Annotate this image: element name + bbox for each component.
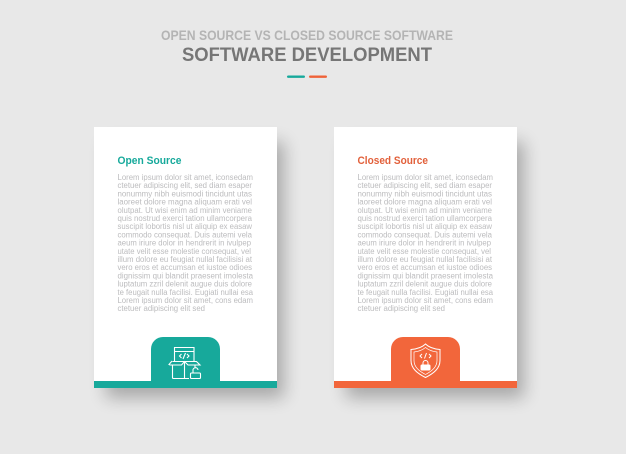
body text: commodo consequat. Duis autemi vela: [118, 230, 253, 239]
body text: ctetuer adipiscing elit sed: [118, 304, 205, 313]
heading: Open Source: [118, 155, 182, 167]
body text: illum dolore eu feugiat nullal facilisisi at: [358, 255, 493, 264]
body text: olutpat. Ut wisi enim ad minim veniame: [118, 206, 253, 215]
body text: aeum iriure dolor in hendrerit in ivulpep: [118, 239, 252, 248]
teal base with tab: [94, 337, 277, 388]
body text: ctetuer adipiscing elit, sed diam esaper: [118, 181, 252, 190]
body text: vero eros et accumsan et iustoe odioes: [358, 263, 492, 272]
card shadow: [346, 142, 524, 398]
title: SOFTWARE DEVELOPMENT: [182, 44, 432, 66]
accent dashes: [287, 76, 327, 78]
body text: laoreet dolore magna aliquam erati vel: [358, 198, 492, 207]
body text: aeum iriure dolor in hendrerit in ivulpep: [358, 239, 492, 248]
orange base with tab: [334, 337, 517, 388]
body text: olutpat. Ut wisi enim ad minim veniame: [358, 206, 493, 215]
card: [334, 127, 517, 388]
body text: suscipit lobortis nisl ut aliquip ex easaw: [118, 222, 252, 231]
body text: suscipit lobortis nisl ut aliquip ex easaw: [358, 222, 492, 231]
card: [94, 127, 277, 388]
subtitle: OPEN SOURCE VS CLOSED SOURCE SOFTWARE: [161, 27, 453, 43]
heading: Closed Source: [358, 155, 428, 167]
body text: te feugait nulla facilisi. Eugiati nullai esa: [118, 288, 254, 297]
body text: nonummy nibh euismodi tincidunt utas: [358, 189, 492, 198]
panel: open source: [94, 127, 284, 398]
body text: luptatum zzril delenit augue duis dolore: [118, 280, 253, 289]
body text: Lorem ipsum dolor sit amet, cons edam: [118, 296, 253, 305]
card shadow: [106, 142, 284, 398]
body text: Lorem ipsum dolor sit amet, iconsedam: [118, 173, 253, 182]
body text: laoreet dolore magna aliquam erati vel: [118, 198, 252, 207]
body text: ctetuer adipiscing elit sed: [358, 304, 445, 313]
body text: Lorem ipsum dolor sit amet, iconsedam: [358, 173, 493, 182]
body text: ctetuer adipiscing elit, sed diam esaper: [358, 181, 492, 190]
icon: shield with code and padlock: [411, 344, 440, 378]
body text: Lorem ipsum dolor sit amet, cons edam: [358, 296, 493, 305]
body text: utate velit esse molestie consequat, vel: [358, 247, 491, 256]
body text: dignissim qui blandit praesent imolesta: [118, 271, 254, 280]
body text: te feugait nulla facilisi. Eugiati nullai esa: [358, 288, 494, 297]
body text: quis nostrud exerci tation ullamcorpera: [358, 214, 493, 223]
body text: dignissim qui blandit praesent imolesta: [358, 271, 494, 280]
body text: luptatum zzril delenit augue duis dolore: [358, 280, 493, 289]
body text: illum dolore eu feugiat nullal facilisisi at: [118, 255, 253, 264]
body text: commodo consequat. Duis autemi vela: [358, 230, 493, 239]
body text: vero eros et accumsan et iustoe odioes: [118, 263, 252, 272]
panel: closed source: [334, 127, 524, 398]
body text: [118, 173, 254, 313]
body text: [358, 173, 494, 313]
header: [161, 27, 453, 78]
body text: utate velit esse molestie consequat, vel: [118, 247, 251, 256]
body text: quis nostrud exerci tation ullamcorpera: [118, 214, 253, 223]
icon: open box with code and padlock: [169, 348, 200, 378]
body text: nonummy nibh euismodi tincidunt utas: [118, 189, 252, 198]
